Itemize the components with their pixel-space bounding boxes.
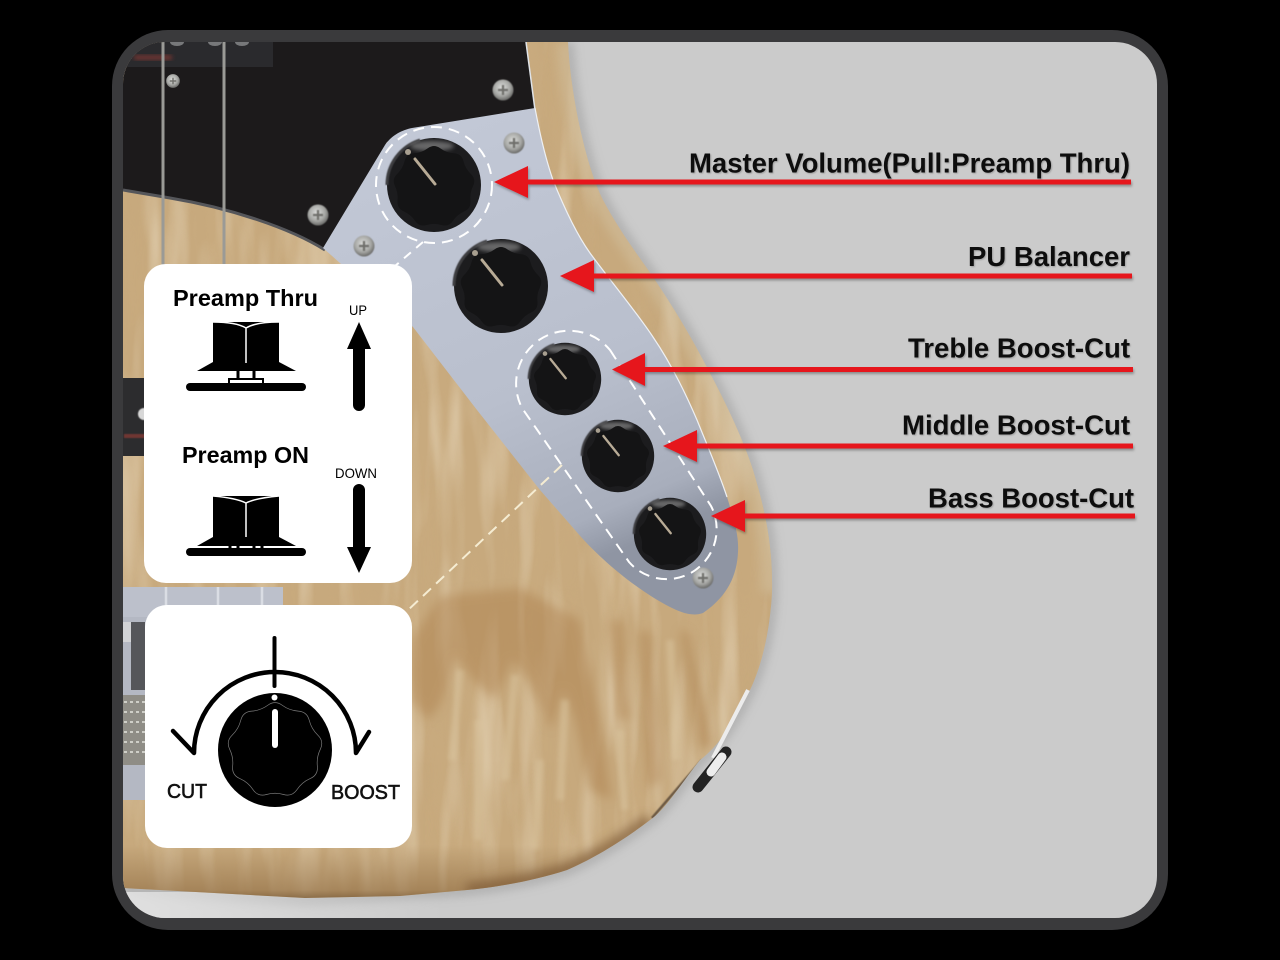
pickup poles [170,42,249,46]
label: middle: Middle Boost-Cut [902,410,1130,440]
label: treble: Treble Boost-Cut [908,332,1130,364]
icon: knob [218,693,332,807]
dark edge near jack [652,760,702,818]
strings [163,42,224,266]
label: DOWN: DOWN [335,465,377,481]
arrow: up [347,322,371,411]
arrow: bass [711,500,1135,532]
panel: cut and boost knob [145,605,412,848]
screws [166,74,714,589]
knob: PU balancer [454,239,548,333]
pickguard edge [123,190,325,250]
arrow: master volume [494,166,1131,198]
arrow: PU balancer [560,260,1132,292]
light floor strip [126,892,376,918]
pickup top [123,42,273,67]
wood body [123,42,783,905]
flame figure [412,588,712,800]
strip highlight [137,407,144,421]
dashed leader: preamp panel [395,242,423,266]
lower body shading [123,852,582,898]
label: UP: UP [349,302,367,318]
pickup logo smudge [134,55,172,60]
strip red label [124,434,146,438]
icon: knob pushed down [186,496,306,556]
body shadow [123,42,772,900]
output jack [698,690,748,787]
plate bright edge [535,108,727,497]
icon: top marker [272,638,276,686]
label: BOOST: BOOST [331,782,400,804]
knob: treble [529,343,601,415]
pickguard [123,42,535,250]
icon: knob pulled up [186,322,306,391]
bass guitar photo [123,42,783,918]
dashed outline: master volume [376,127,492,243]
heading: preamp on: Preamp ON [182,442,309,468]
knob: middle [582,420,654,492]
grey background panel [123,42,1157,918]
dashed outline: EQ knobs [516,331,717,579]
dashed leader: knob panel [406,465,562,612]
label: bass: Bass Boost-Cut [928,482,1134,514]
label: PU balancer: PU Balancer [968,241,1130,272]
label: master volume: Master Volume(Pull:Preamp Thru) [689,148,1130,178]
knob: master volume [387,138,481,232]
left pickup strip [123,378,144,456]
panel: preamp switch [144,264,412,583]
bridge assembly [123,587,283,800]
knob: bass [634,498,706,570]
arrow: middle [663,430,1133,462]
body bevel [467,820,650,890]
outer frame [112,30,1168,930]
heading: preamp thru: Preamp Thru [173,285,318,311]
label: CUT: CUT [167,781,207,803]
control plate [323,108,738,614]
icon: sweep arrow [173,672,369,753]
arrow: down [347,484,371,573]
arrow: treble [612,353,1133,386]
